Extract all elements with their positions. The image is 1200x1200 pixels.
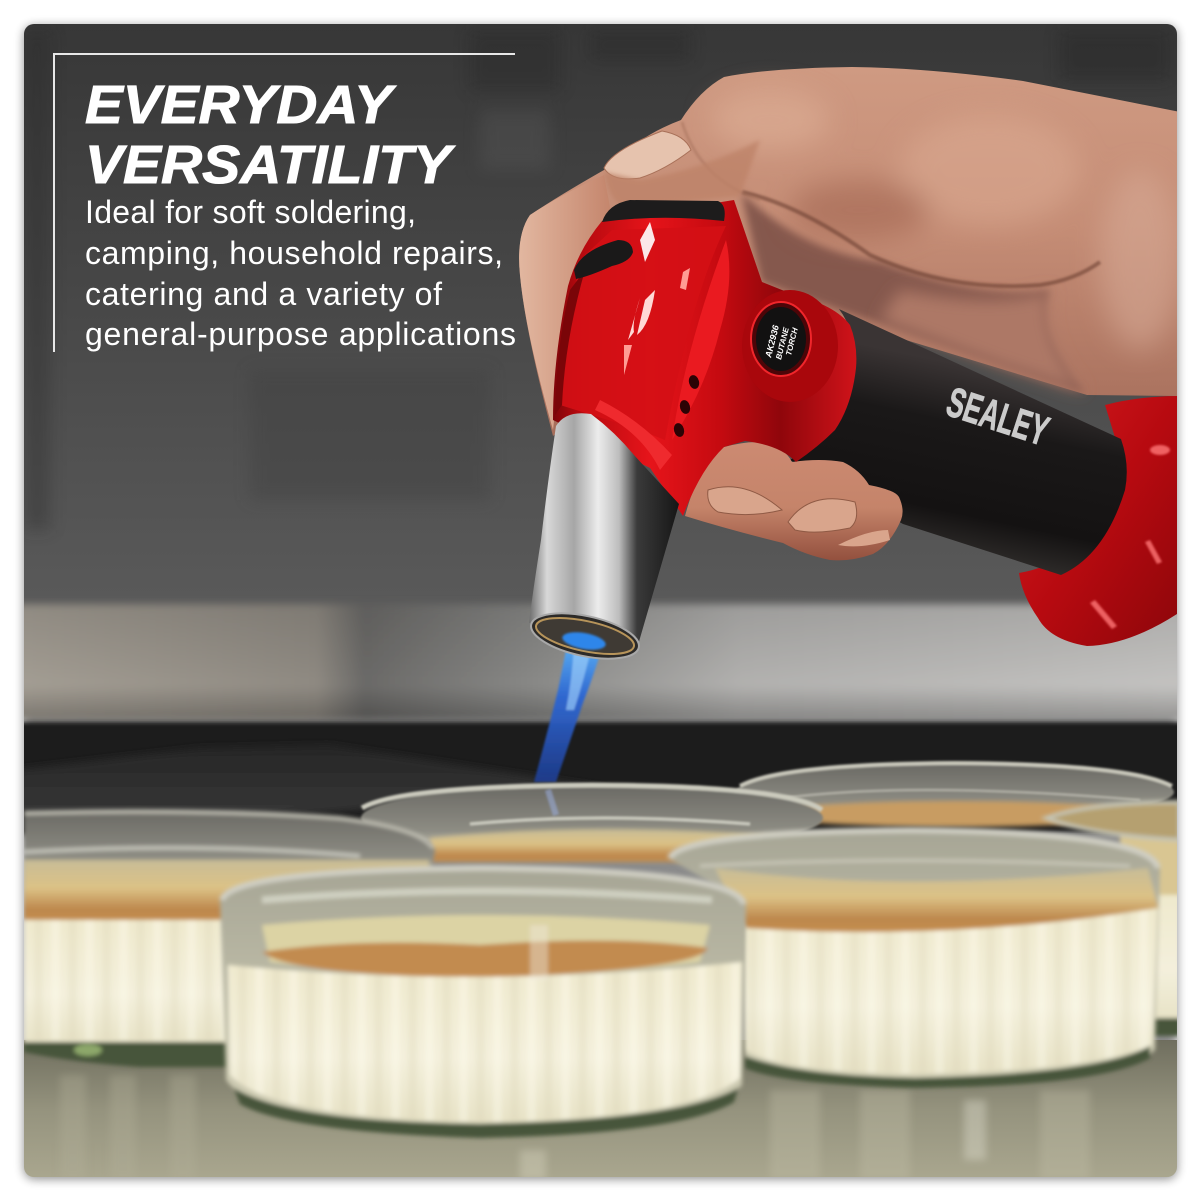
heading xyxy=(85,85,456,184)
blurred steel shelf xyxy=(10,604,1190,720)
body text: Ideal for soft soldering, xyxy=(85,194,416,230)
thumb nail xyxy=(604,131,691,179)
torch black barrel xyxy=(790,309,1127,575)
heading: EVERYDAY xyxy=(85,75,397,135)
body text xyxy=(85,194,516,352)
body text: camping, household repairs, xyxy=(85,235,503,271)
round adjuster badge: AK2936 xyxy=(763,323,781,359)
top trigger cap xyxy=(602,200,725,222)
left ramekin xyxy=(24,809,435,1067)
hand: back of hand xyxy=(519,67,1180,436)
heading: VERSATILITY xyxy=(85,135,456,195)
far right ramekin xyxy=(1046,802,1180,1036)
front centre ramekin xyxy=(220,866,746,1138)
body text: general-purpose applications xyxy=(85,316,516,352)
torch red body xyxy=(553,200,856,516)
title block frame xyxy=(54,54,515,352)
dark worktop xyxy=(14,745,620,835)
base highlights xyxy=(1090,445,1170,629)
knuckle highlights xyxy=(710,90,1180,350)
table reflections xyxy=(60,1075,1090,1180)
back centre ramekin xyxy=(361,785,823,862)
round adjuster badge: TORCH xyxy=(784,327,800,356)
thumb underside xyxy=(606,141,759,202)
finger nails xyxy=(708,487,782,515)
thumb crease xyxy=(742,192,1100,286)
chrome nozzle xyxy=(529,413,679,645)
vent holes xyxy=(674,375,700,437)
body text: catering and a variety of xyxy=(85,276,442,312)
round adjuster badge: BUTANE xyxy=(774,326,791,360)
flame xyxy=(533,652,600,783)
nozzle tip xyxy=(530,612,640,660)
red body reflections xyxy=(555,222,729,470)
SEALEY logo: SEALEY xyxy=(941,378,1055,455)
side lock slider xyxy=(574,240,633,279)
dark counter band xyxy=(14,722,1190,832)
fingers under torch xyxy=(685,442,903,560)
right front ramekin xyxy=(668,828,1160,1088)
torch base xyxy=(1019,396,1180,646)
left palm highlight xyxy=(519,175,612,430)
wall tile texture xyxy=(24,30,1170,530)
reflective table xyxy=(24,1040,1177,1180)
shaded palm behind torch xyxy=(741,192,1085,393)
round adjuster badge xyxy=(742,290,838,402)
background wall xyxy=(24,24,1177,614)
back right ramekin xyxy=(736,763,1174,827)
